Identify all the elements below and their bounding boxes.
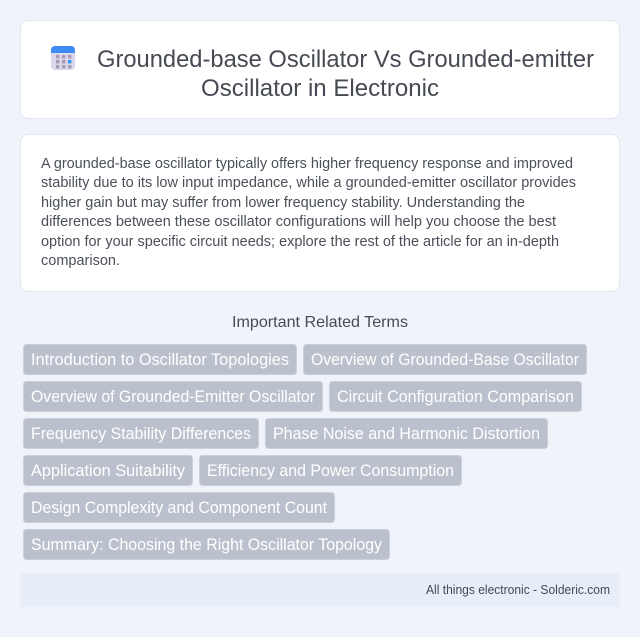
tag list xyxy=(24,344,586,560)
tag: summary: Summary: Choosing the Right Oscillator Topology xyxy=(31,536,383,554)
tag: circuit configuration xyxy=(330,382,582,412)
text block: summary paragraph: comparison. xyxy=(41,253,120,269)
title xyxy=(97,46,594,102)
tag: introduction: Introduction to Oscillator Topologies xyxy=(31,351,289,369)
tag: frequency stability: Frequency Stability Differences xyxy=(31,425,251,443)
tag: application suitability xyxy=(24,456,192,486)
text block: summary paragraph: A grounded-base oscillator typically offers higher frequency response and improved xyxy=(41,156,573,172)
text block: summary paragraph xyxy=(41,156,576,269)
tag: grounded-base overview: Overview of Grounded-Base Oscillator xyxy=(311,351,580,369)
panel: summary card xyxy=(20,134,620,292)
tag: introduction xyxy=(24,344,296,374)
footer credit: All things electronic - Solderic.com xyxy=(426,583,610,597)
tag: grounded-emitter overview: Overview of Grounded-Emitter Oscillator xyxy=(31,388,316,406)
tag: grounded-base overview xyxy=(304,344,586,374)
footer bar xyxy=(20,573,620,607)
title: Grounded-base Oscillator Vs Grounded-emitter xyxy=(97,46,594,73)
tag: summary xyxy=(24,530,390,560)
tag: circuit configuration: Circuit Configuration Comparison xyxy=(337,388,574,406)
text block: summary paragraph: differences between these oscillator configurations will help you choose the best xyxy=(41,214,556,230)
icon: calendar grid xyxy=(51,46,75,70)
title: Oscillator in Electronic xyxy=(201,75,439,102)
panel: header card xyxy=(20,20,620,118)
text block: summary paragraph: stability due to its low input impedance, while a grounded-emitter oscillator provides xyxy=(41,175,576,191)
tag: frequency stability xyxy=(24,418,258,448)
text block: summary paragraph: option for your specific circuit needs; explore the rest of the article for an in-depth xyxy=(41,234,559,250)
tag: grounded-emitter overview xyxy=(24,382,322,412)
tag: design complexity xyxy=(24,492,334,522)
tag: phase noise: Phase Noise and Harmonic Distortion xyxy=(273,425,540,443)
tag: efficiency: Efficiency and Power Consumption xyxy=(207,462,454,480)
tag: design complexity: Design Complexity and Component Count xyxy=(31,499,327,517)
text block: summary paragraph: higher gain but may suffer from lower frequency stability. Understanding the xyxy=(41,195,525,211)
tag: phase noise xyxy=(266,418,548,448)
tag: application suitability: Application Suitability xyxy=(31,462,186,480)
tag: efficiency xyxy=(200,456,462,486)
heading: important related terms: Important Related Terms xyxy=(232,314,408,331)
